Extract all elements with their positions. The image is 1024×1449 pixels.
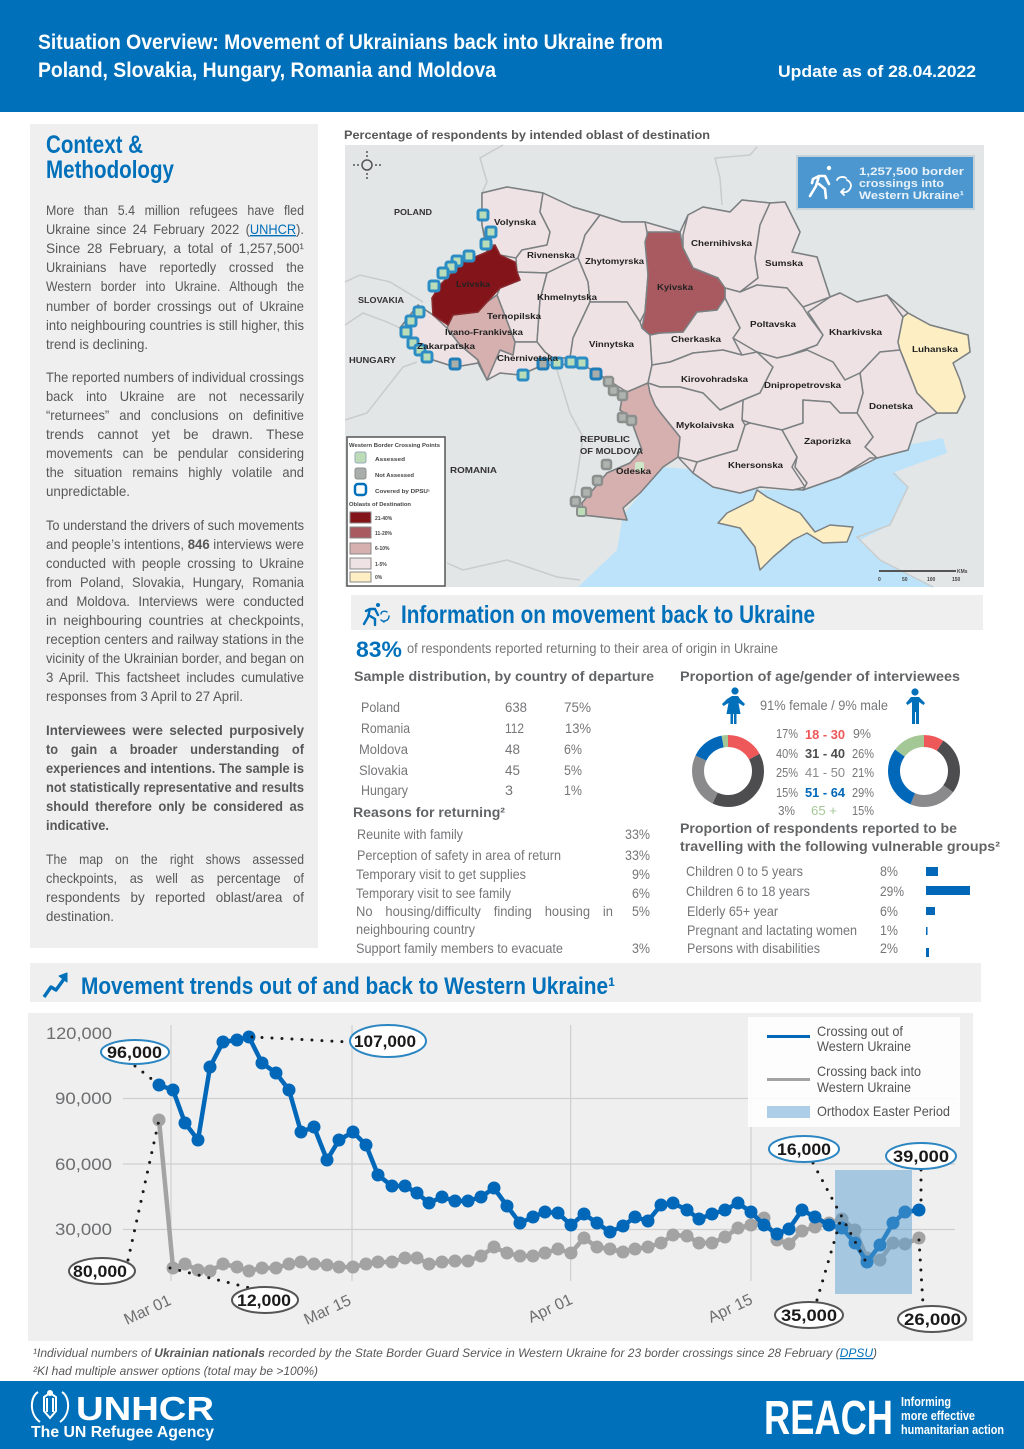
footnotes: ¹Individual numbers of Ukrainian nationals recorded by the State Border Guard Service in Western Ukraine for 23 border crossings since 28 February (DPSU) bbox=[33, 1346, 877, 1360]
y axis labels: 60,000 bbox=[55, 1155, 112, 1174]
section header: information on movement: Information on movement back to Ukraine bbox=[401, 601, 815, 629]
map labels: POLAND bbox=[394, 207, 432, 217]
text block: interviews: 3 April. This factsheet includes cumulative bbox=[46, 669, 304, 685]
table: sample distribution: 1% bbox=[564, 782, 582, 798]
oblast: Vinnytska bbox=[570, 302, 652, 392]
chart: vulnerable groups: Pregnant and lactating women bbox=[687, 922, 857, 938]
text block: returnees caveat bbox=[46, 369, 304, 499]
oblast: Dnipropetrovska bbox=[742, 350, 863, 430]
legend: map bbox=[347, 437, 445, 586]
text block: interviews: reception centers and railway stations in the bbox=[46, 631, 304, 647]
age group table: 15% bbox=[852, 803, 874, 818]
chart: vulnerable groups: Persons with disabilities bbox=[687, 940, 820, 956]
map scale bar: 150 bbox=[952, 577, 961, 583]
legend: chart bbox=[748, 1017, 960, 1127]
callout: 35,000 bbox=[775, 1302, 843, 1328]
text block: interviews: in neighbouring countries at checkpoints, bbox=[46, 612, 304, 628]
icon: male bbox=[906, 688, 925, 724]
legend: map: 1-5% bbox=[375, 562, 387, 568]
text block: map note: destination. bbox=[46, 908, 114, 924]
x axis labels: Apr 01 bbox=[526, 1291, 576, 1327]
legend: map: 0% bbox=[375, 575, 383, 581]
icon: rising arrow bbox=[44, 973, 67, 997]
oblast: Odeska bbox=[582, 383, 680, 520]
text block: returnees caveat: The reported numbers of individual crossings bbox=[46, 369, 304, 385]
map labels: Chernihivska bbox=[691, 239, 753, 248]
map heading: Percentage of respondents by intended oblast of destination bbox=[344, 128, 710, 142]
age group table: 51 - 64 bbox=[805, 785, 846, 800]
table: reasons for returning: Support family members to evacuate bbox=[356, 940, 563, 956]
donut: male age groups bbox=[894, 741, 954, 801]
oblast: Chernivetska bbox=[487, 342, 580, 380]
text block: sampling note: to gain a broader understanding of bbox=[46, 741, 304, 757]
table: sample distribution: Moldova bbox=[359, 741, 408, 757]
map labels: HUNGARY bbox=[349, 355, 396, 365]
table: reasons for returning: 33% bbox=[625, 826, 650, 842]
oblast: Poltavska bbox=[725, 285, 823, 358]
table: sample distribution: 45 bbox=[505, 762, 520, 778]
table: reasons for returning: 5% bbox=[632, 903, 650, 919]
icon: compass bbox=[353, 151, 381, 179]
oblast: Lvivska bbox=[432, 245, 520, 325]
oblast: Kharkivska bbox=[790, 293, 903, 380]
x axis labels: Apr 15 bbox=[706, 1291, 756, 1327]
oblast: Zaporizka bbox=[782, 400, 877, 490]
map labels: Zaporizka bbox=[804, 437, 852, 446]
map labels: Kyivska bbox=[657, 283, 694, 292]
age group table: 29% bbox=[852, 785, 874, 800]
y axis labels: 30,000 bbox=[55, 1220, 112, 1239]
age group table bbox=[776, 726, 874, 818]
oblast: Kirovohradska bbox=[648, 350, 773, 410]
callout: 80,000: 80,000 bbox=[73, 1262, 127, 1281]
legend: map: Covered by DPSU¹ bbox=[375, 489, 430, 495]
map labels: Mykolaivska bbox=[676, 421, 735, 430]
text block: sampling note: indicative. bbox=[46, 817, 109, 833]
panel: context and methodology bbox=[30, 124, 318, 948]
key figure: 83% returning: 83% bbox=[356, 637, 402, 662]
map labels: Luhanska bbox=[912, 345, 959, 354]
chart gridlines bbox=[123, 1025, 955, 1281]
legend: chart: Western Ukraine bbox=[817, 1079, 911, 1095]
text block: map note: The map on the right shows assessed bbox=[46, 851, 304, 867]
table: reasons for returning bbox=[353, 805, 650, 956]
text block: interviews: and Moldova. Interviews were conducted bbox=[46, 593, 304, 609]
map scale bar: KMs bbox=[957, 569, 968, 575]
callout: 96,000: 96,000 bbox=[107, 1043, 162, 1062]
band: Orthodox Easter period bbox=[835, 1170, 912, 1294]
table: sample distribution: Poland bbox=[361, 699, 400, 715]
age group table: 41 - 50 bbox=[805, 765, 845, 780]
age group table: 15% bbox=[776, 785, 798, 800]
map labels: Khersonska bbox=[728, 461, 784, 470]
map labels: Khmelnytska bbox=[537, 293, 598, 302]
oblast: Luhanska bbox=[898, 313, 970, 413]
text block: interviews: responses from 3 April to 27 April. bbox=[46, 688, 243, 704]
chart: vulnerable groups: Children 0 to 5 years bbox=[686, 863, 803, 879]
table: sample distribution: 13% bbox=[565, 720, 591, 736]
heading: context and methodology: Context & bbox=[46, 131, 143, 159]
map labels: ROMANIA bbox=[450, 465, 497, 475]
footer banner bbox=[0, 1381, 1024, 1449]
text block: interviews: and people’s intentions, 846 interviews were bbox=[46, 536, 304, 552]
logo: REACH: Informing bbox=[901, 1395, 951, 1409]
oblast: Zhytomyrska bbox=[578, 215, 648, 322]
legend: map: Oblasts of Destination bbox=[349, 502, 411, 508]
oblast: Rivnenska bbox=[516, 193, 600, 273]
callout: 12,000 bbox=[232, 1287, 298, 1313]
map labels: Ivano-Frankivska bbox=[445, 328, 524, 337]
line chart: crossings bbox=[28, 1013, 973, 1341]
map labels: Cherkaska bbox=[671, 335, 722, 344]
map labels: REPUBLIC bbox=[580, 434, 630, 444]
map: oblasts of Ukraine bbox=[345, 145, 984, 587]
text block: returnees caveat: “returnees” and conclusions on definitive bbox=[46, 407, 304, 423]
text block: returnees caveat: trends cannot yet be drawn. These bbox=[46, 426, 304, 442]
Ukraine outline underlay bbox=[400, 187, 970, 520]
callout: 16,000: 16,000 bbox=[777, 1140, 831, 1159]
map labels: Ternopilska bbox=[487, 312, 542, 321]
text block: map note: checkpoints, as well as percentage of bbox=[46, 870, 304, 886]
map labels: Lvivska bbox=[456, 280, 491, 289]
table: sample distribution: Romania bbox=[361, 720, 410, 736]
callout: 107,000: 107,000 bbox=[354, 1032, 416, 1051]
chart: vulnerable groups: 2% bbox=[880, 940, 898, 956]
chart: vulnerable groups bbox=[680, 821, 1001, 957]
text block: refugee numbers: number of border crossings out of Ukraine bbox=[46, 298, 304, 314]
age group table: 9% bbox=[853, 726, 871, 741]
x axis labels: Mar 01 bbox=[122, 1292, 174, 1329]
table: reasons for returning: Temporary visit to see family bbox=[356, 885, 511, 901]
legend: map: 21-40% bbox=[375, 516, 393, 522]
text block: refugee numbers: trend is declining. bbox=[46, 336, 148, 352]
update date: Update as of 28.04.2022 bbox=[778, 62, 976, 81]
legend: map: Not Assessed bbox=[375, 473, 414, 479]
legend: map: Western Border Crossing Points bbox=[349, 443, 440, 449]
footnotes bbox=[33, 1346, 877, 1378]
table: reasons for returning: No housing/difficulty finding housing in bbox=[356, 903, 613, 919]
age group table: 25% bbox=[776, 765, 798, 780]
line: crossing back into Western Ukraine bbox=[159, 1120, 919, 1271]
table: reasons for returning: Temporary visit to get supplies bbox=[356, 866, 526, 882]
y axis labels: 120,000 bbox=[46, 1024, 112, 1043]
table: sample distribution bbox=[354, 669, 655, 798]
text block: sampling note: experiences and intentions. The sample is bbox=[46, 760, 304, 776]
table: sample distribution: 5% bbox=[564, 762, 582, 778]
chart: age and gender of interviewees: Proportion of age/gender of interviewees bbox=[680, 669, 960, 684]
text block: interviews: vicinity of the Ukrainian border, and began on bbox=[46, 650, 304, 666]
oblast: Zakarpatska bbox=[400, 305, 478, 367]
chart: vulnerable groups: 29% bbox=[880, 883, 904, 899]
text block: refugee numbers: Ukrainians have reportedly crossed the bbox=[46, 259, 304, 275]
legend: map: 6-10% bbox=[375, 546, 390, 552]
text block: map note bbox=[46, 851, 304, 924]
age group table: 18 - 30 bbox=[805, 727, 845, 742]
heading: context and methodology: Methodology bbox=[46, 156, 174, 184]
footnotes: ²KI had multiple answer options (total may be >100%) bbox=[33, 1364, 318, 1378]
callout: 96,000 bbox=[101, 1040, 169, 1064]
title bbox=[38, 31, 663, 82]
age group table: 3% bbox=[778, 803, 795, 818]
table: reasons for returning: 33% bbox=[625, 847, 650, 863]
callout: 107,000 bbox=[350, 1025, 426, 1057]
chart: vulnerable groups: 1% bbox=[880, 922, 898, 938]
icon: person returning bbox=[810, 166, 851, 198]
heading: context and methodology bbox=[46, 131, 174, 184]
age group table: 26% bbox=[852, 746, 874, 761]
text block: interviews: from Poland, Slovakia, Hungary, Romania bbox=[46, 574, 304, 590]
oblast: Ivano-Frankivska bbox=[447, 295, 515, 380]
oblast: Crimea bbox=[718, 490, 853, 570]
title: Situation Overview: Movement of Ukrainians back into Ukraine from bbox=[38, 31, 663, 54]
table: reasons for returning: 6% bbox=[632, 885, 650, 901]
table: reasons for returning: Perception of safety in area of return bbox=[357, 847, 561, 863]
text block: refugee numbers: More than 5.4 million refugees have fled bbox=[46, 202, 304, 218]
text block: refugee numbers: into neighbouring countries is still higher, this bbox=[46, 317, 304, 333]
chart: vulnerable groups: Children 6 to 18 years bbox=[686, 883, 810, 899]
x axis labels: Mar 15 bbox=[302, 1292, 354, 1329]
icon: runner bbox=[364, 603, 389, 625]
text block: refugee numbers: Western border into Ukraine. Although the bbox=[46, 278, 304, 294]
table: sample distribution: 3 bbox=[505, 782, 513, 798]
map labels: Chernivetska bbox=[497, 354, 559, 363]
border crossing points bbox=[401, 210, 644, 516]
legend: chart: Orthodox Easter Period bbox=[817, 1103, 950, 1119]
oblast: Kyivska bbox=[642, 232, 725, 335]
table: reasons for returning: Reasons for returning² bbox=[353, 805, 506, 820]
callout: border crossings into Western Ukraine bbox=[796, 155, 975, 210]
callout: 80,000 bbox=[69, 1258, 135, 1284]
map scale bar bbox=[878, 569, 968, 583]
text block: returnees caveat: back into Ukraine are not necessarily bbox=[46, 388, 304, 404]
donut: female age groups bbox=[698, 741, 758, 801]
map labels: Volynska bbox=[494, 218, 537, 227]
text block: sampling note: not statistically representative and results bbox=[46, 779, 304, 795]
oblast: Khmelnytska bbox=[537, 258, 590, 358]
text block: sampling note bbox=[46, 722, 304, 833]
text block: returnees caveat: movements can be pendular considering bbox=[46, 445, 304, 461]
oblast: Donetska bbox=[857, 350, 937, 458]
text block: refugee numbers: Ukraine since 24 February 2022 (UNHCR). bbox=[46, 221, 304, 237]
section header: movement trends bbox=[30, 963, 981, 1002]
table: sample distribution: Slovakia bbox=[359, 762, 408, 778]
callout: border crossings into Western Ukraine: crossings into bbox=[859, 178, 944, 190]
table: sample distribution: 48 bbox=[505, 741, 520, 757]
legend: map: 11-20% bbox=[375, 531, 393, 537]
key figure: 83% returning: of respondents reported returning to their area of origin in Ukraine bbox=[407, 640, 778, 656]
age group table: 17% bbox=[776, 726, 798, 741]
key figure: 83% returning bbox=[356, 637, 778, 662]
map scale bar: 0 bbox=[878, 577, 881, 583]
line: crossing out of Western Ukraine bbox=[159, 1037, 919, 1262]
text block: interviews bbox=[46, 517, 304, 704]
callout: 39,000 bbox=[886, 1143, 956, 1169]
logo: UNHCR: UNHCR bbox=[76, 1390, 214, 1427]
chart: vulnerable groups: Elderly 65+ year bbox=[687, 903, 778, 919]
table: reasons for returning: 9% bbox=[632, 866, 650, 882]
callout: 26,000: 26,000 bbox=[904, 1310, 961, 1329]
text block: refugee numbers bbox=[46, 202, 304, 352]
callout: border crossings into Western Ukraine: 1,257,500 border bbox=[859, 166, 965, 178]
x axis labels bbox=[122, 1291, 756, 1329]
callout: 16,000 bbox=[769, 1136, 839, 1162]
text block: returnees caveat: unpredictable. bbox=[46, 483, 130, 499]
table: sample distribution: Hungary bbox=[361, 782, 408, 798]
text block: sampling note: Interviewees were selected purposively bbox=[46, 722, 304, 738]
chart: age and gender of interviewees bbox=[680, 669, 960, 818]
text block: refugee numbers: Since 28 February, a total of 1,257,500¹ bbox=[46, 240, 304, 256]
map labels: Kharkivska bbox=[829, 328, 883, 337]
map labels: Poltavska bbox=[750, 320, 797, 329]
table: sample distribution: 112 bbox=[505, 720, 524, 736]
map labels: Odeska bbox=[616, 467, 652, 476]
map labels: SLOVAKIA bbox=[358, 295, 404, 305]
callout: 12,000: 12,000 bbox=[237, 1291, 291, 1310]
legend: map: Assessed bbox=[375, 457, 405, 463]
oblast: Volynska bbox=[482, 187, 550, 258]
legend: chart: Western Ukraine bbox=[817, 1038, 911, 1054]
logo: REACH: humanitarian action bbox=[901, 1423, 1004, 1437]
section header: movement trends: Movement trends out of and back to Western Ukraine¹ bbox=[81, 973, 615, 1000]
text block: sampling note: should therefore only be considered as bbox=[46, 798, 304, 814]
section header: information on movement bbox=[351, 595, 983, 630]
icon: female bbox=[722, 687, 745, 724]
callout: 35,000: 35,000 bbox=[781, 1306, 837, 1325]
oblast: Sumska bbox=[740, 202, 830, 307]
y axis labels: 90,000 bbox=[55, 1089, 112, 1108]
map scale bar: 50 bbox=[902, 577, 908, 583]
chart: age and gender of interviewees: 91% female / 9% male bbox=[760, 697, 888, 713]
text block: map note: respondents by reported oblast/area of bbox=[46, 889, 304, 905]
oblast: Khersonska bbox=[693, 423, 805, 493]
logo: UNHCR bbox=[31, 1390, 214, 1441]
map labels: Rivnenska bbox=[527, 251, 576, 260]
title: Poland, Slovakia, Hungary, Romania and Moldova bbox=[38, 59, 496, 82]
map scale bar: 100 bbox=[927, 577, 936, 583]
callout: 39,000: 39,000 bbox=[893, 1147, 949, 1166]
y axis labels bbox=[46, 1024, 112, 1239]
legend: chart: Crossing back into bbox=[817, 1063, 921, 1079]
map labels: Kirovohradska bbox=[681, 375, 749, 384]
chart: vulnerable groups: 8% bbox=[880, 863, 898, 879]
map labels: Donetska bbox=[869, 402, 914, 411]
logo: REACH: more effective bbox=[901, 1409, 975, 1423]
age group table: 40% bbox=[776, 746, 798, 761]
map labels: OF MOLDOVA bbox=[580, 446, 643, 456]
dotted leader lines bbox=[128, 1037, 923, 1304]
chart: vulnerable groups: travelling with the following vulnerable groups² bbox=[680, 839, 1001, 854]
oblast: Mykolaivska bbox=[648, 383, 745, 462]
text block: returnees caveat: the situation remains highly volatile and bbox=[46, 464, 304, 480]
table: reasons for returning: neighbouring country bbox=[356, 921, 475, 937]
table: sample distribution: 638 bbox=[505, 699, 527, 715]
chart: vulnerable groups: Proportion of respondents reported to be bbox=[680, 821, 958, 836]
oblast: Ternopilska bbox=[497, 272, 547, 342]
map labels: Vinnytska bbox=[589, 340, 635, 349]
logo: REACH: REACH bbox=[764, 1392, 893, 1445]
map labels: Zakarpatska bbox=[417, 342, 476, 351]
logo: UNHCR: The UN Refugee Agency bbox=[31, 1424, 214, 1441]
callout: 26,000 bbox=[898, 1306, 966, 1332]
header banner bbox=[0, 0, 1024, 112]
map labels: Dnipropetrovska bbox=[764, 381, 842, 390]
oblast: Chernihivska bbox=[683, 200, 770, 292]
text block: interviews: conducted with people crossing to Ukraine bbox=[46, 555, 304, 571]
oblast: Cherkaska bbox=[650, 298, 742, 365]
map labels: Sumska bbox=[765, 259, 804, 268]
map labels: Zhytomyrska bbox=[585, 257, 645, 266]
age group table: 31 - 40 bbox=[805, 746, 845, 761]
chart: vulnerable groups: 6% bbox=[880, 903, 898, 919]
text block: interviews: To understand the drivers of such movements bbox=[46, 517, 304, 533]
table: sample distribution: Sample distribution, by country of departure bbox=[354, 669, 655, 684]
table: sample distribution: 6% bbox=[564, 741, 582, 757]
table: sample distribution: 75% bbox=[564, 699, 591, 715]
age group table: 21% bbox=[852, 765, 874, 780]
table: reasons for returning: 3% bbox=[632, 940, 650, 956]
age group table: 65 + bbox=[811, 803, 837, 818]
map labels bbox=[349, 207, 959, 476]
callout: border crossings into Western Ukraine: Western Ukraine¹ bbox=[859, 190, 964, 202]
icon: UNHCR emblem bbox=[32, 1391, 68, 1422]
legend: chart: Crossing out of bbox=[817, 1023, 903, 1039]
table: reasons for returning: Reunite with family bbox=[357, 826, 463, 842]
